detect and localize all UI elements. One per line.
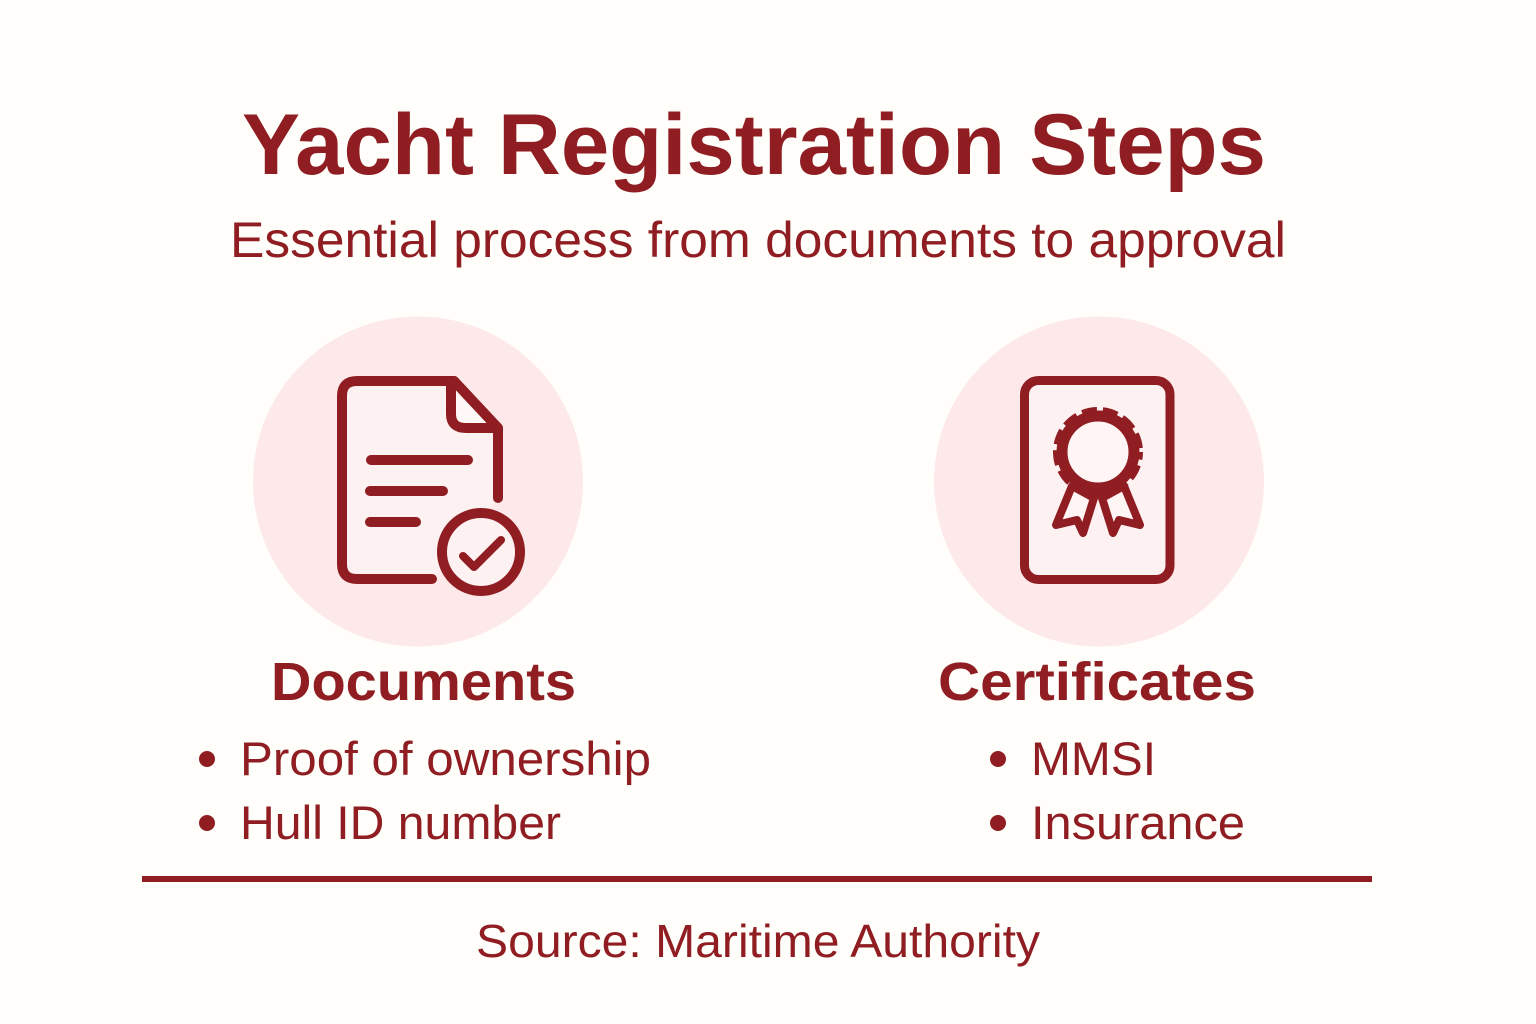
source note: Source: Maritime Authority xyxy=(476,915,1040,967)
bullet list: documents: Hull ID number xyxy=(240,796,561,849)
icon: document with check mark xyxy=(253,316,583,646)
heading: documents: Documents xyxy=(271,652,576,712)
title: Yacht Registration Steps xyxy=(242,97,1266,193)
heading: certificates: Certificates xyxy=(938,652,1256,712)
panel: certificates xyxy=(934,316,1264,849)
bullet list: documents: Proof of ownership xyxy=(240,732,651,785)
bullet list: certificates xyxy=(990,732,1245,849)
bullet list: certificates: Insurance xyxy=(1031,796,1245,849)
bullet list: documents xyxy=(199,732,651,849)
bullet list: certificates: MMSI xyxy=(1031,732,1156,785)
panel: documents xyxy=(199,316,651,849)
icon: certificate with rosette xyxy=(934,316,1264,646)
subtitle: Essential process from documents to approval xyxy=(230,212,1286,268)
